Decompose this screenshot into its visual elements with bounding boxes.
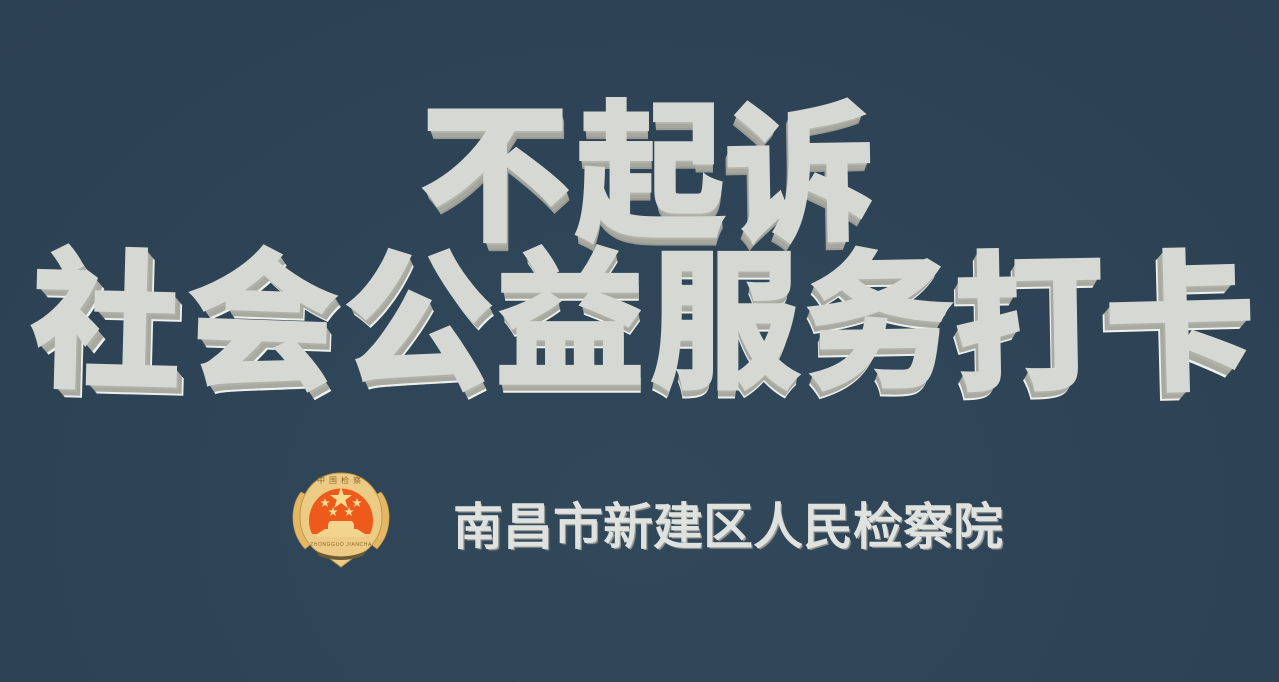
icon: procuratorate emblem (292, 472, 390, 568)
subtitle: organisation name: 南昌市新建区人民检察院 (453, 499, 1003, 555)
title character: 不 (420, 92, 570, 260)
title line 1 (420, 90, 876, 261)
title character: 会 (184, 236, 340, 410)
emblem gold shield (300, 473, 382, 567)
title character: 服 (650, 239, 800, 407)
emblem stars (320, 487, 362, 516)
title line 2 (29, 236, 1257, 411)
title character: 打 (953, 240, 1105, 410)
title character: 社 (29, 237, 183, 409)
title character: 公 (341, 237, 495, 409)
title character: 益 (495, 238, 645, 406)
emblem upper lettering: 中国检察 (317, 475, 365, 485)
emblem lower lettering: ZHONGGUO JIANCHA (310, 542, 372, 548)
title character: 诉 (724, 91, 876, 261)
title character: 卡 (1103, 239, 1257, 411)
title character: 起 (575, 90, 725, 258)
emblem ribbon (316, 551, 366, 560)
emblem wheat wreath (293, 492, 389, 549)
emblem red disc (309, 488, 373, 534)
emblem gate building (317, 521, 365, 537)
title character: 务 (803, 238, 955, 408)
